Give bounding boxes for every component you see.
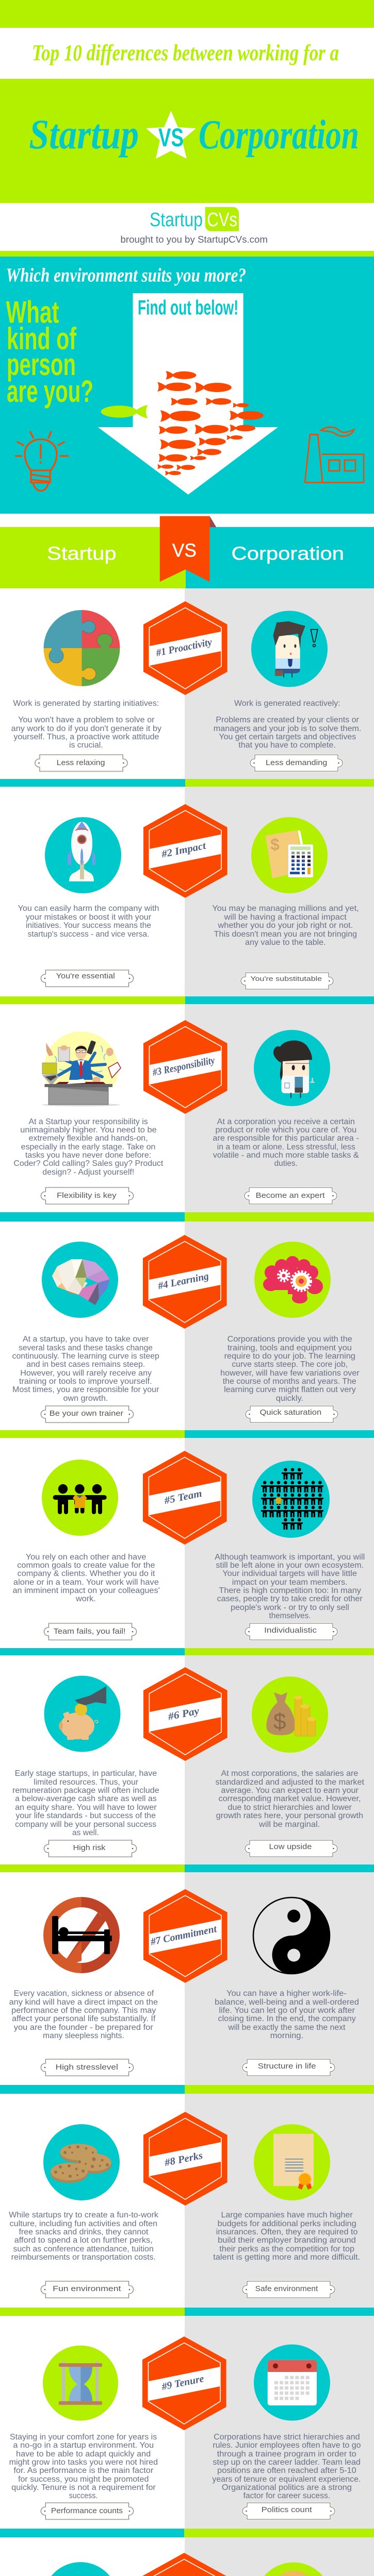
text: corporation pay: average. You can expect to earn your [221, 1786, 359, 1795]
text: corporation commitment: morning. [270, 2031, 303, 2040]
tag: High risk: High risk [73, 1843, 106, 1852]
text: startup proactivity [11, 699, 161, 750]
text: startup team: common goals to create value for the [17, 1561, 155, 1570]
badge: #2 Impact: #2 Impact [160, 840, 207, 860]
hero banner [0, 79, 374, 203]
heading: what kind of person: kind of [7, 321, 77, 356]
text: startup commitment: you are the founder - be prepared for [14, 2023, 153, 2032]
comparison header [0, 516, 374, 588]
text: corporation responsibility: are responsible for this particular area - [213, 1134, 359, 1143]
text: corporation responsibility: product or role which you care of. You [216, 1126, 356, 1134]
tag: Fun environment [41, 2281, 133, 2298]
text: corporation tenure [212, 2433, 361, 2500]
text: startup pay: remuneration package will often include [12, 1786, 159, 1795]
icon: multitasking businessman [36, 1031, 121, 1107]
tag: Become an expert [245, 1188, 337, 1204]
icon: factory [305, 427, 364, 483]
text: startup impact: your mistakes or boost it with your [26, 913, 151, 922]
icon: star with VS [146, 111, 196, 159]
tag: Performance counts: Performance counts [51, 2506, 123, 2515]
text: startup learning: training or tools to improve yourself. [19, 1377, 152, 1386]
thin lime band [0, 251, 374, 257]
tag: You're essential [41, 970, 133, 987]
green fish [101, 405, 148, 418]
tag: Flexibility is key [41, 1188, 133, 1204]
tag: Individualistic [245, 1623, 337, 1640]
badge: #6 Pay [143, 1667, 227, 1761]
tag: Quick saturation: Quick saturation [260, 1408, 321, 1417]
tag: Performance counts [41, 2503, 133, 2519]
badge: #9 Tenure [142, 2336, 226, 2430]
tag: Fun environment: Fun environment [53, 2284, 121, 2293]
tag: Team fails, you fail! [44, 1623, 136, 1640]
icon: piggy bank [44, 1675, 121, 1752]
text: startup responsibility: Coder? Cold calling? Sales guy? Product [13, 1159, 164, 1168]
tag: Less relaxing [35, 755, 127, 771]
text: corporation team: Your individual targets will have little [222, 1569, 357, 1578]
top band [0, 0, 374, 28]
text: startup proactivity: is crucial. [69, 741, 103, 750]
divider bar 3 [0, 1212, 374, 1222]
text: startup perks [9, 2211, 158, 2262]
heading: which environment: Which environment suits you more? [6, 265, 246, 286]
icon: star with VS: VS [158, 123, 184, 152]
gray right column background [185, 588, 374, 2576]
text: corporation tenure: step up on the career ladder. Team lead [213, 2458, 361, 2467]
icon: calculator and ledger [251, 817, 328, 893]
icon: calendar [254, 2344, 330, 2420]
text: startup commitment: many sleepless nights. [43, 2031, 124, 2040]
icon: calculator and ledger: $ [270, 835, 280, 854]
tag: Structure in life: Structure in life [258, 2062, 316, 2071]
text: corporation proactivity: that you have to complete. [238, 741, 336, 750]
icon: yin yang [253, 1897, 330, 1974]
icon: certificate [254, 2124, 330, 2200]
header label: Corporation: Corporation [231, 543, 344, 564]
logo: StartupCVs top [150, 207, 239, 231]
tag: Politics count: Politics count [262, 2505, 313, 2514]
tag: Less demanding [250, 755, 343, 771]
text: corporation proactivity: Problems are created by your clients or [216, 716, 359, 724]
text: startup learning [12, 1335, 159, 1403]
heading: what kind of person: person [7, 347, 76, 382]
section 1: proactivity [11, 601, 361, 771]
section 7: commitment [9, 1889, 359, 2076]
tagline: brought to you by StartupCVs.com [121, 234, 268, 245]
text: startup pay: limited resources. Thus, your [34, 1778, 138, 1787]
tag: You're essential: You're essential [56, 972, 115, 980]
text: corporation perks: budgets for additional perks including [218, 2219, 356, 2228]
text: corporation commitment: balance, well-being and a well-ordered [215, 1998, 359, 2007]
text: startup learning: own growth. [63, 1394, 108, 1403]
tag: Be your own trainer [41, 1406, 133, 1422]
text: startup team: alone or in a team. Your work will have [13, 1578, 159, 1587]
text: corporation learning: however, will have few variations over [220, 1369, 360, 1378]
text: startup pay [12, 1769, 159, 1837]
text: startup impact: You can easily harm the company with [18, 904, 159, 913]
ribbon: VS: VS [172, 540, 197, 561]
badge: #5 Team [143, 1451, 227, 1545]
text: corporation pay: due to strict hierarchies and lower [228, 1803, 352, 1812]
text: corporation team: There is high competition too: In many [219, 1586, 361, 1595]
text: corporation perks: build their employer branding around [218, 2236, 356, 2245]
text: startup learning: However, you will rarely receive any [20, 1369, 152, 1378]
text: corporation impact: This doesn't mean you are not bringing [214, 930, 357, 939]
tag: Individualistic: Individualistic [264, 1626, 317, 1635]
divider bar 6 [0, 1865, 374, 1872]
text: startup commitment: any kind will have a direct impact on the [9, 1998, 158, 2007]
text: startup tenure: for. As performance is the main factor [13, 2466, 153, 2475]
divider bar 7 [0, 2085, 374, 2094]
section 10: recognition [9, 2553, 361, 2576]
text: startup commitment [9, 1989, 158, 2040]
text: startup perks: reimbursements or transportation costs. [11, 2253, 156, 2262]
panel: which environment [0, 257, 374, 514]
text: corporation learning: Corporations provide you with the [227, 1335, 352, 1344]
text: corporation commitment: will be exactly the same the next [227, 2023, 346, 2032]
text: corporation proactivity [214, 699, 361, 750]
logo: StartupCVs top: Startup [150, 209, 203, 231]
text: corporation pay: standardized and adjusted to the market [216, 1778, 365, 1787]
hero word: Startup: Startup [29, 111, 139, 158]
school of orange fish [157, 371, 264, 476]
text: corporation tenure: rules. Junior employees often have to go [213, 2441, 361, 2450]
logo: StartupCVs top: CVs [207, 209, 237, 231]
section 6: pay [12, 1667, 365, 1857]
tag: High stresslevel [41, 2059, 133, 2076]
icon: team of three [42, 1460, 118, 1536]
section 3: responsibility [13, 1020, 359, 1204]
text: startup perks: culture, including fun activities and often [9, 2219, 157, 2228]
text: corporation proactivity: You get certain targets and objectives [219, 733, 356, 741]
section 2: impact [18, 804, 359, 989]
text: corporation responsibility: duties. [274, 1159, 298, 1168]
text: startup responsibility: unimaginably higher. You need to be [20, 1126, 157, 1134]
text: startup perks: While startups try to create a fun-to-work [9, 2211, 158, 2219]
icon: no sleep sign [43, 1897, 120, 1973]
text: corporation impact: will be having a fractional impact [224, 913, 347, 922]
text: corporation learning [220, 1335, 360, 1403]
text: startup tenure: quickly. Tenure is not a requirement for [11, 2483, 156, 2492]
arrow label: Find out below! [138, 297, 238, 319]
text: corporation learning: curve starts steep. The core job, [232, 1360, 348, 1369]
text: corporation tenure: Organizational politics are a strong [222, 2483, 352, 2492]
header label: Startup: Startup [47, 543, 117, 564]
text: corporation commitment: closing time. In the end, the company [218, 2014, 356, 2023]
heading: what kind of person: What [6, 295, 59, 330]
text: startup perks: afford to spend a lot on further perks, [14, 2236, 153, 2245]
tag: Low upside: Low upside [269, 1842, 312, 1851]
text: corporation learning: quickly. [276, 1394, 303, 1403]
text: startup proactivity: yourself. Thus, a proactive work attitude [13, 733, 159, 741]
text: corporation tenure: positions are often reached after 5-10 [217, 2466, 356, 2475]
text: corporation responsibility: At a corporation you receive a certain [217, 1117, 355, 1126]
text: startup responsibility: especially in the early stage. Take on [21, 1143, 155, 1151]
text: corporation tenure: Corporations have strict hierarchies and [214, 2433, 360, 2442]
text: corporation commitment: life. You can let go of your work after [219, 2006, 355, 2015]
text: startup impact [18, 904, 159, 939]
text: corporation responsibility: volatile - and much more stable tasks & [213, 1151, 359, 1160]
text: startup pay: an equity share. You will have to lower [15, 1803, 157, 1812]
tag: High risk [44, 1840, 136, 1857]
badge: #3 Responsibility [143, 1020, 227, 1114]
text: startup proactivity: Work is generated by starting initiatives: [13, 699, 159, 708]
arrow [98, 293, 278, 495]
section 4: learning [12, 1235, 360, 1422]
divider bar 1 [0, 779, 374, 787]
divider bar 4 [0, 1430, 374, 1438]
heading: what kind of person: are you? [7, 374, 93, 409]
icon: low-poly brain [42, 1242, 118, 1318]
tag: Safe environment [242, 2281, 335, 2298]
text: startup pay: your life standards - but success of the [15, 1811, 156, 1820]
icon: hourglass [43, 2345, 118, 2420]
text: startup tenure: have to be able to adapt quickly and [16, 2450, 151, 2459]
text: corporation responsibility [213, 1117, 359, 1168]
ribbon: VS [160, 516, 216, 582]
text: startup commitment: performance of the company. This may [11, 2006, 156, 2015]
text: startup impact: initiatives. Your success means the [26, 921, 151, 930]
text: corporation learning: training, tools and equipment you [227, 1344, 352, 1352]
text: startup responsibility: At a Startup your responsibility is [29, 1117, 148, 1126]
text: corporation perks: talent is getting more and more difficult. [213, 2253, 360, 2262]
text: corporation perks: Large companies have much higher [221, 2211, 353, 2219]
text: corporation tenure: through a trainee program in order to [217, 2450, 356, 2459]
icon: number one rosette [255, 2563, 332, 2576]
tag: You're substitutable: You're substitutable [250, 975, 322, 982]
text: corporation impact [212, 904, 359, 947]
text: startup responsibility: design? - Adjust yourself! [42, 1168, 134, 1177]
text: startup learning: Most times, you are responsible for your [12, 1385, 159, 1394]
text: startup pay: a below-average cash share as well as [15, 1794, 157, 1803]
text: startup responsibility: extremely flexible and hands-on, [29, 1134, 148, 1143]
text: startup perks: such as conference attendance, tuition [13, 2245, 154, 2253]
text: corporation perks: their perks as the competition for top [219, 2245, 354, 2253]
tag: Be your own trainer: Be your own trainer [50, 1409, 123, 1418]
badge: #2 Impact [143, 804, 227, 898]
badge: #8 Perks: #8 Perks [163, 2150, 204, 2168]
badge: #1 Proactivity [143, 601, 227, 695]
tag: Team fails, you fail!: Team fails, you fail! [54, 1627, 126, 1636]
text: corporation learning: the course of months and years. The [223, 1377, 356, 1386]
text: corporation team: themselves. [269, 1612, 311, 1620]
tag: You're substitutable [241, 973, 333, 989]
text: startup team [12, 1553, 160, 1603]
tag: Less relaxing: Less relaxing [57, 758, 105, 767]
badge: #8 Perks [143, 2112, 227, 2206]
text: corporation impact: You may be managing millions and yet, [212, 904, 359, 913]
badge: #3 Responsibility: #3 Responsibility [151, 1055, 216, 1078]
icon: businessman [251, 611, 328, 687]
text: corporation team: Although teamwork is important, you will [215, 1553, 365, 1562]
badge: #4 Learning: #4 Learning [156, 1270, 210, 1292]
badge: #10 Recognition [142, 2553, 226, 2576]
text: corporation tenure: factor for career sucess. [243, 2492, 330, 2500]
icon: cookies [43, 2124, 120, 2200]
text: startup team: work. [75, 1595, 96, 1603]
icon: lab scientist [254, 1030, 330, 1106]
text: corporation responsibility: in a team or alone. Less stressful, less [217, 1143, 355, 1151]
text: startup learning: and in best cases remains steep. [26, 1360, 145, 1369]
text: startup learning: several tasks and these tasks change [19, 1344, 153, 1352]
badge: #5 Team: #5 Team [163, 1488, 203, 1506]
text: corporation learning: learning curve might flatten out very [224, 1385, 356, 1394]
icon: puzzle [43, 609, 121, 687]
icon: money bag and coins: $ [273, 1709, 286, 1734]
text: startup proactivity: any work to do if you don't generate it by [11, 724, 161, 733]
text: startup pay: company will be your personal success [15, 1820, 156, 1829]
section 9: tenure [9, 2336, 361, 2519]
text: startup tenure: might grow into tasks you were not hired [9, 2458, 158, 2467]
divider bar 2 [0, 996, 374, 1004]
icon: money bag and coins [252, 1676, 328, 1753]
text: corporation commitment: You can have a higher work-life- [226, 1989, 347, 1998]
text: corporation team: still be left alone in your own ecosystem. [216, 1561, 364, 1570]
tag: Flexibility is key: Flexibility is key [57, 1191, 117, 1200]
text: startup proactivity: You won't have a problem to solve or [18, 716, 154, 724]
tag: Structure in life [242, 2059, 335, 2076]
text: startup tenure: for success, you might be promoted [18, 2475, 149, 2484]
text: corporation perks [213, 2211, 360, 2262]
badge: #4 Learning [143, 1235, 227, 1329]
badge: #1 Proactivity: #1 Proactivity [155, 636, 213, 659]
text: corporation tenure: years of tenure or equivalent experience. [212, 2475, 361, 2484]
text: startup pay: as well. [72, 1828, 99, 1837]
tag: Politics count [242, 2503, 335, 2519]
text: corporation impact: any value to the table. [245, 938, 326, 947]
icon: rocket [45, 817, 121, 893]
tag: Quick saturation [246, 1406, 338, 1422]
icon: crowd [252, 1461, 330, 1538]
badge: #9 Tenure: #9 Tenure [160, 2373, 205, 2393]
tag: Low upside [245, 1840, 337, 1857]
text: corporation proactivity: Work is generated reactively: [234, 699, 340, 708]
text: corporation pay: will be marginal. [258, 1820, 320, 1829]
text: corporation team: impact on your team members. [232, 1578, 348, 1587]
text: corporation proactivity: managers and your job is to solve them. [214, 724, 361, 733]
text: corporation pay: At most corporations, the salaries are [221, 1769, 358, 1778]
badge: #6 Pay: #6 Pay [167, 1705, 200, 1723]
text: startup team: an imminent impact on your colleagues' [12, 1586, 160, 1595]
tag: Become an expert: Become an expert [256, 1191, 326, 1200]
text: startup team: You rely on each other and have [26, 1553, 146, 1562]
text: corporation perks: insurances. Often, they are required to [216, 2228, 357, 2236]
text: startup team: company & clients. Whether you do it [18, 1569, 155, 1578]
divider bar 5 [0, 1648, 374, 1655]
tag: High stresslevel: High stresslevel [56, 2063, 118, 2072]
divider bar 9 [0, 2529, 374, 2537]
text: corporation learning: require to do your job. The learning [224, 1352, 355, 1361]
text: corporation commitment [215, 1989, 359, 2040]
text: startup impact: startup's success - and vice versa. [28, 930, 149, 939]
divider bar 8 [0, 2308, 374, 2316]
text: startup responsibility: tasks you have never done before: [25, 1151, 151, 1160]
icon: light bulb [15, 432, 68, 491]
text: startup pay: Early stage startups, in particular, have [15, 1769, 157, 1778]
heading: what kind of person [6, 295, 93, 409]
tag: Less demanding: Less demanding [266, 758, 327, 767]
text: corporation team: cases, people try to take credit for other [217, 1595, 363, 1603]
text: corporation impact: whether you do your job right or not. [217, 921, 353, 930]
text: startup tenure [9, 2433, 158, 2500]
icon: brain with gears [254, 1242, 331, 1318]
text: corporation team [215, 1553, 365, 1620]
tag: Safe environment: Safe environment [255, 2284, 318, 2293]
text: startup tenure: Staying in your comfort zone for years is [10, 2433, 157, 2442]
section 8: perks [9, 2112, 360, 2298]
text: corporation team: people's work - or try to only sell [231, 1603, 349, 1612]
text: startup learning: continuously. The learning curve is steep [12, 1352, 159, 1361]
text: startup commitment: affect your personal life substantially. If [12, 2014, 156, 2023]
text: corporation pay: growth rates here, your personal growth [216, 1811, 363, 1820]
text: corporation pay: corresponding market value. However, [219, 1794, 361, 1803]
text: corporation pay [216, 1769, 365, 1829]
text: startup commitment: Every vacation, sickness or absence of [14, 1989, 154, 1998]
section 5: team [12, 1451, 365, 1640]
icon: sunglasses [43, 2562, 118, 2576]
text: startup tenure: a no-go in a startup environment. You [13, 2441, 154, 2450]
badge: #7 Commitment [143, 1889, 227, 1983]
text: startup learning: At a startup, you have to take over [23, 1335, 149, 1344]
text: startup responsibility [13, 1117, 164, 1177]
text: startup perks: free snacks and drinks, they cannot [19, 2228, 149, 2236]
badge: #7 Commitment: #7 Commitment [149, 1923, 218, 1948]
text: startup tenure: success. [69, 2492, 98, 2500]
